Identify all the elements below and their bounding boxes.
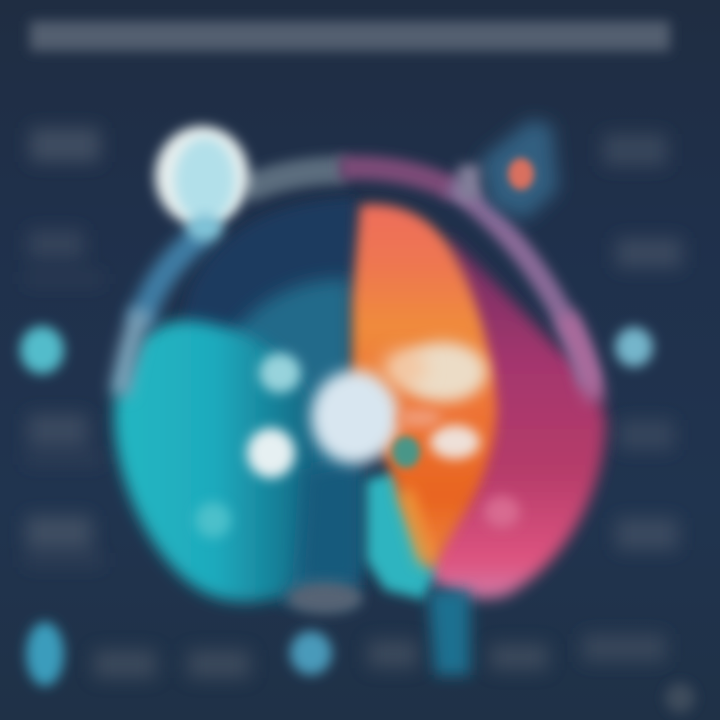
text block: left column [24,128,104,568]
icon: central circle group [195,342,520,538]
ring arc blue left [140,232,205,325]
deep teal inner arc [225,279,352,600]
icon: bottom stem [428,590,470,675]
teal lower wedge [366,470,435,600]
ring arc pale left [120,310,142,395]
text block: right column [582,134,682,662]
ring arc gray [245,170,345,190]
dark blue center core [298,460,362,585]
orange wedge [352,204,497,572]
teal left lobe [114,321,318,602]
dark inner region [179,198,355,590]
pink right lobe [422,235,606,599]
text block: bottom row [94,640,548,678]
icon: left teal dot [20,326,64,374]
icon: large light circle [155,126,249,242]
chart: circular diagram [114,168,606,602]
ring arc magenta [340,168,455,190]
ring arc lower lilac [565,315,595,400]
icon: right blue dot [615,327,653,367]
yellow fringe [398,490,432,565]
icon: bottom center dot [290,631,332,675]
caption under chart [287,582,363,614]
icon: corner badge [665,683,695,713]
ring arc lilac [450,185,590,385]
icon: top right satellite [458,120,558,220]
title [30,21,670,51]
icon: bottom left drop [26,622,64,686]
